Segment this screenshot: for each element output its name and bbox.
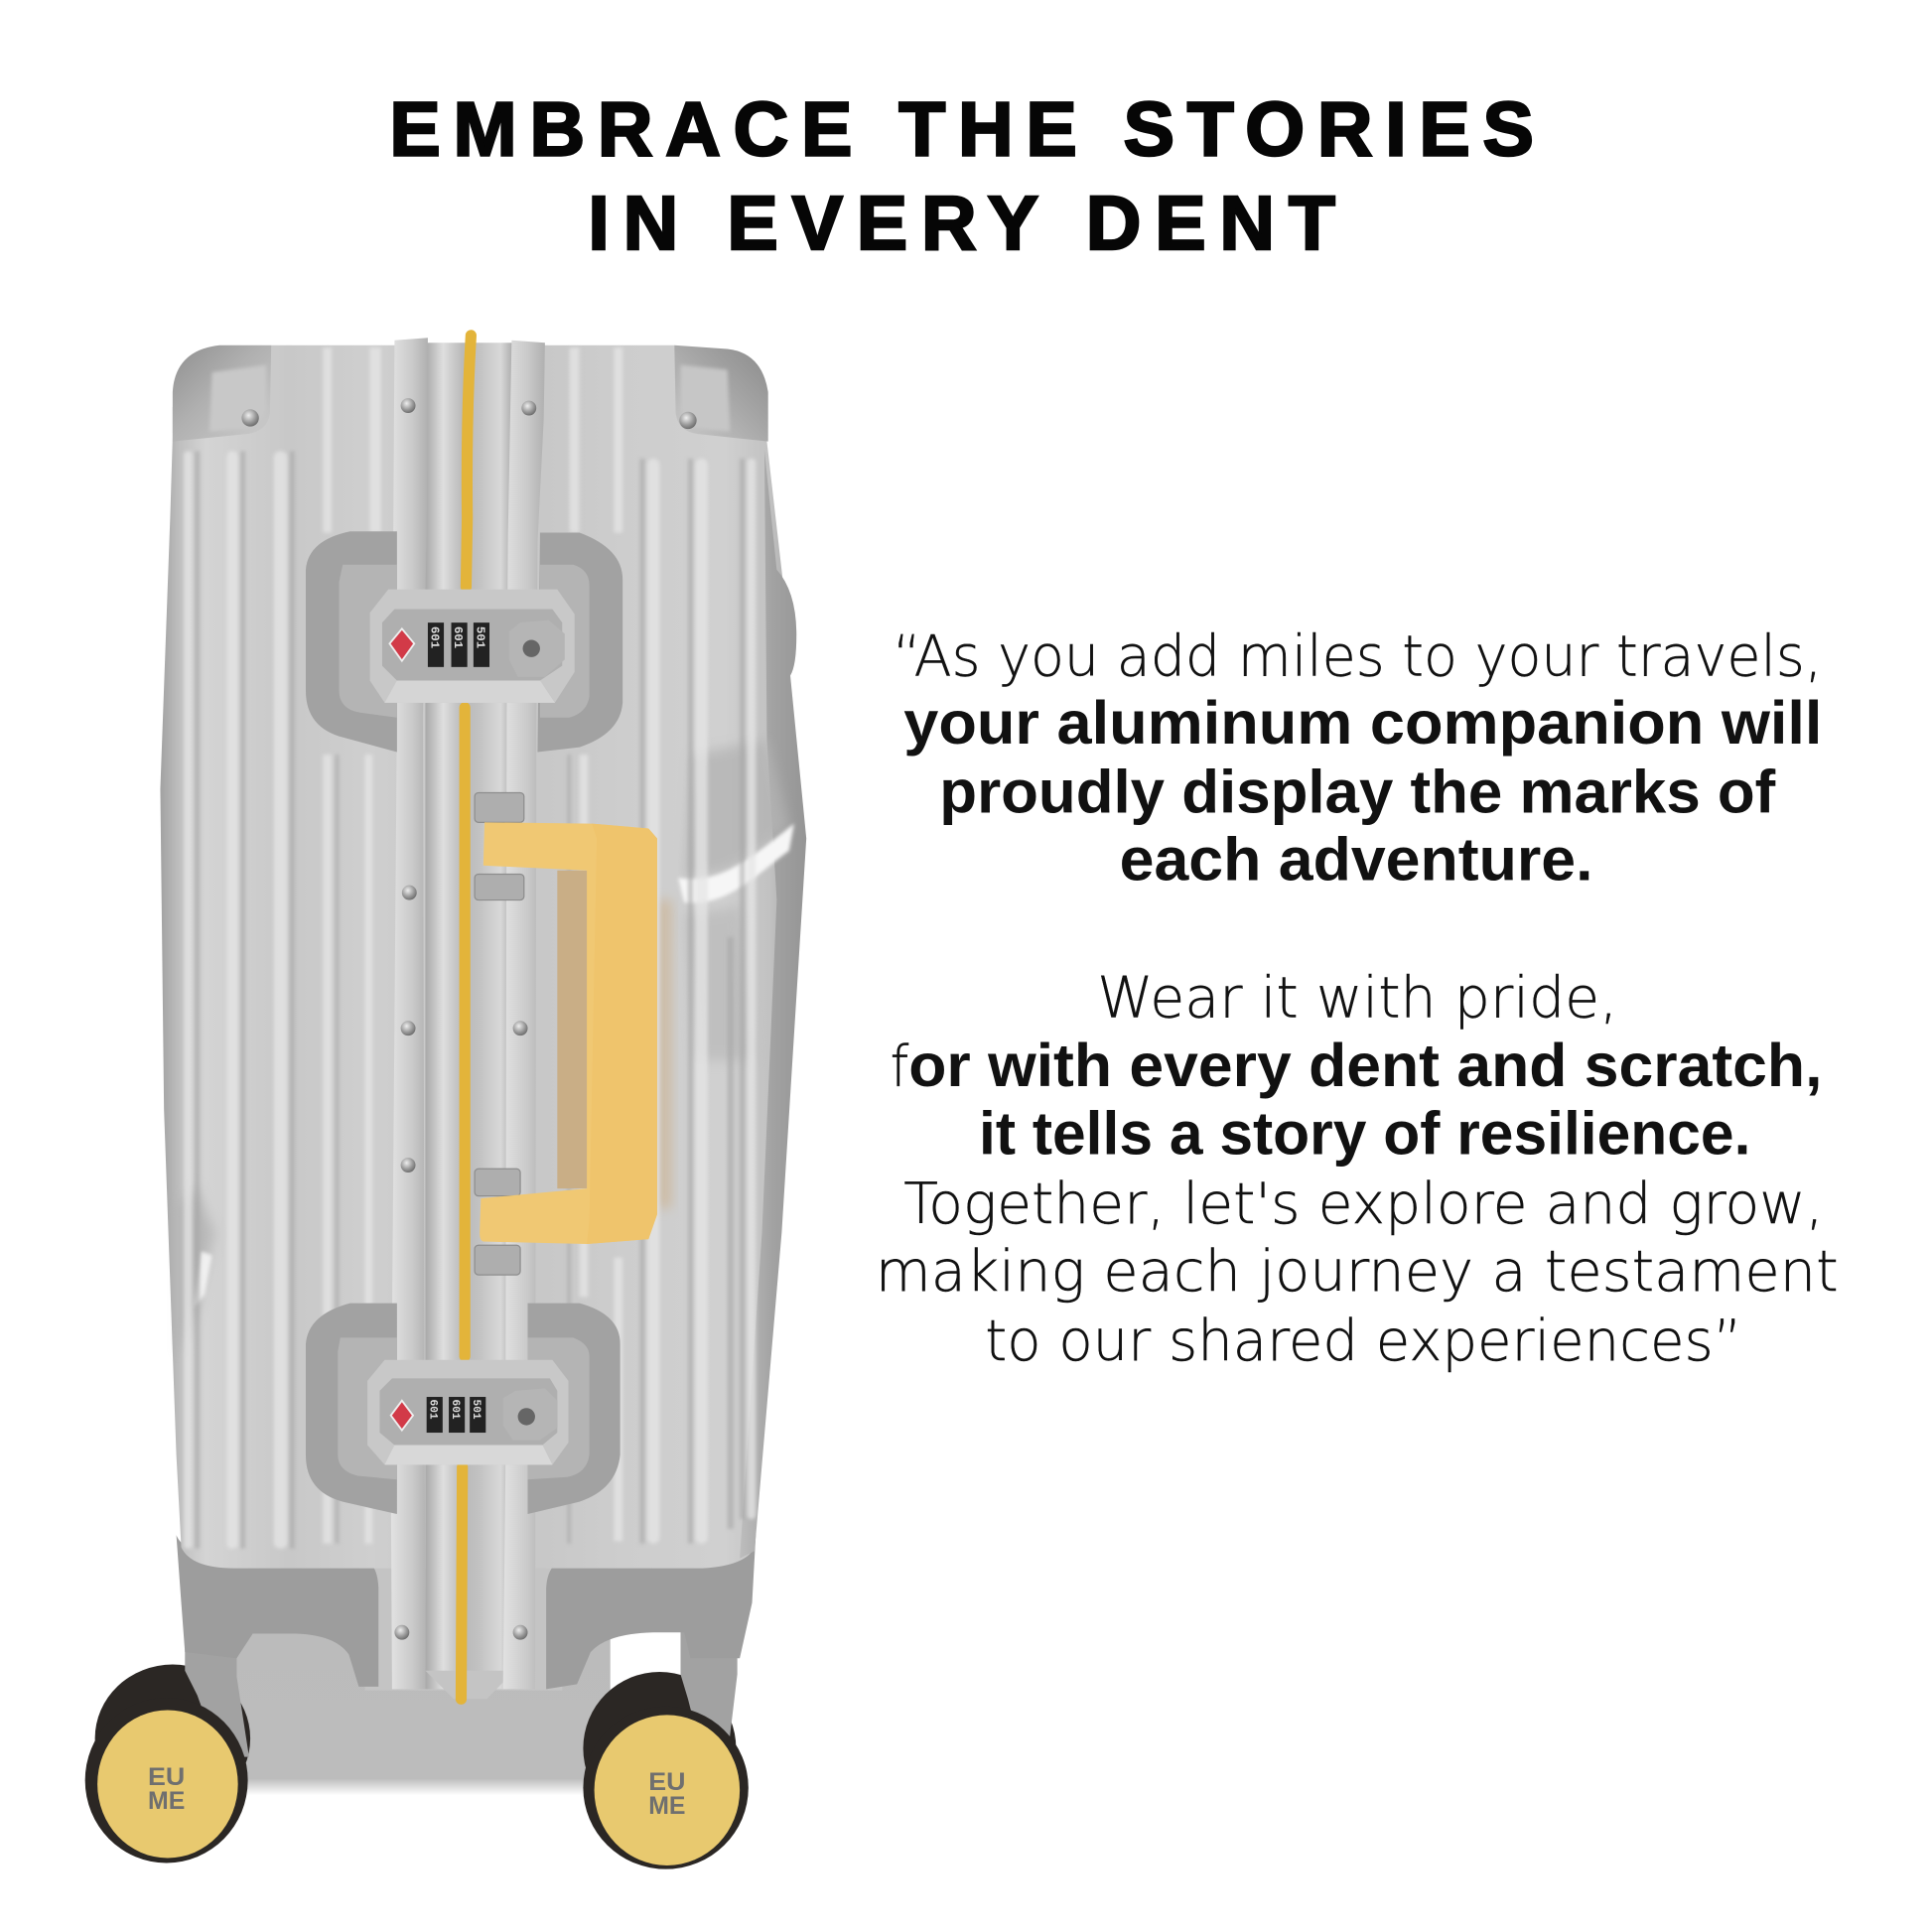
title: IN EVERY DENT xyxy=(588,181,1340,266)
quote text: “As you add miles to your travels, xyxy=(893,624,1822,690)
frame strip left xyxy=(391,338,428,1689)
wheel logo xyxy=(148,1764,185,1815)
quote text: each adventure. xyxy=(1120,826,1592,894)
wheel logo: ME xyxy=(648,1793,685,1820)
code wheels: 501 xyxy=(470,1400,482,1420)
wheel logo: ME xyxy=(148,1788,185,1815)
code wheels: 601 xyxy=(426,1400,438,1420)
quote text: your aluminum companion will xyxy=(903,689,1822,757)
lock recess bottom xyxy=(306,1304,621,1514)
quote text xyxy=(876,624,1839,1374)
shell ribs xyxy=(184,347,756,1549)
key slot xyxy=(523,640,540,657)
quote text: f xyxy=(891,1035,908,1100)
suitcase illustration xyxy=(85,336,806,1869)
title xyxy=(389,86,1539,266)
combination lock top xyxy=(370,590,575,703)
corner cap right xyxy=(674,345,768,442)
wheel logo xyxy=(648,1769,685,1820)
base center silver backing xyxy=(365,1548,562,1691)
code wheels xyxy=(428,622,489,667)
top corner caps xyxy=(173,345,768,442)
quote text: Together, let's explore and grow, xyxy=(903,1172,1824,1237)
rear wheels xyxy=(95,1665,736,1825)
lower-left dent xyxy=(180,1183,214,1356)
corner cap left xyxy=(173,345,271,442)
yellow handle xyxy=(480,822,657,1244)
title: EMBRACE THE STORIES xyxy=(389,86,1539,172)
quote text: it tells a story of resilience. xyxy=(979,1099,1750,1167)
base panel left xyxy=(177,1535,378,1687)
key slot xyxy=(518,1408,535,1426)
yellow seal strip xyxy=(461,336,471,1699)
handle reflection xyxy=(658,900,671,1208)
base panel right xyxy=(546,1535,756,1689)
right side panel with dent xyxy=(740,450,806,1559)
code wheels xyxy=(426,1397,485,1433)
corner plate left xyxy=(209,365,266,432)
combination lock bottom xyxy=(367,1360,568,1464)
code wheels: 601 xyxy=(449,1400,461,1420)
rivets xyxy=(241,398,697,1640)
TSA emblem xyxy=(391,1401,413,1431)
frame strip right xyxy=(503,341,545,1689)
handle hinges xyxy=(475,793,524,1275)
corner plate right xyxy=(681,365,730,432)
quote text: to our shared experiences” xyxy=(985,1309,1742,1374)
aluminum shell xyxy=(160,345,801,1569)
floor shadow xyxy=(228,1630,611,1795)
lock recess top xyxy=(306,531,622,753)
dent shading xyxy=(678,740,794,1060)
wheel logo: EU xyxy=(148,1764,185,1791)
code wheels: 601 xyxy=(428,626,442,648)
center frame xyxy=(391,338,545,1699)
right front wheel xyxy=(583,1707,749,1869)
code wheels: 501 xyxy=(474,626,487,648)
quote text: or with every dent and scratch, xyxy=(908,1032,1822,1099)
left front wheel xyxy=(85,1698,248,1863)
quote text: proudly display the marks of xyxy=(939,758,1776,825)
wheel forks and base mounts xyxy=(185,1627,738,1757)
wheel logo: EU xyxy=(648,1769,685,1796)
quote text: making each journey a testament xyxy=(876,1239,1839,1305)
TSA emblem xyxy=(389,628,414,661)
quote text: Wear it with pride, xyxy=(1097,966,1617,1032)
code wheels: 601 xyxy=(451,626,465,648)
